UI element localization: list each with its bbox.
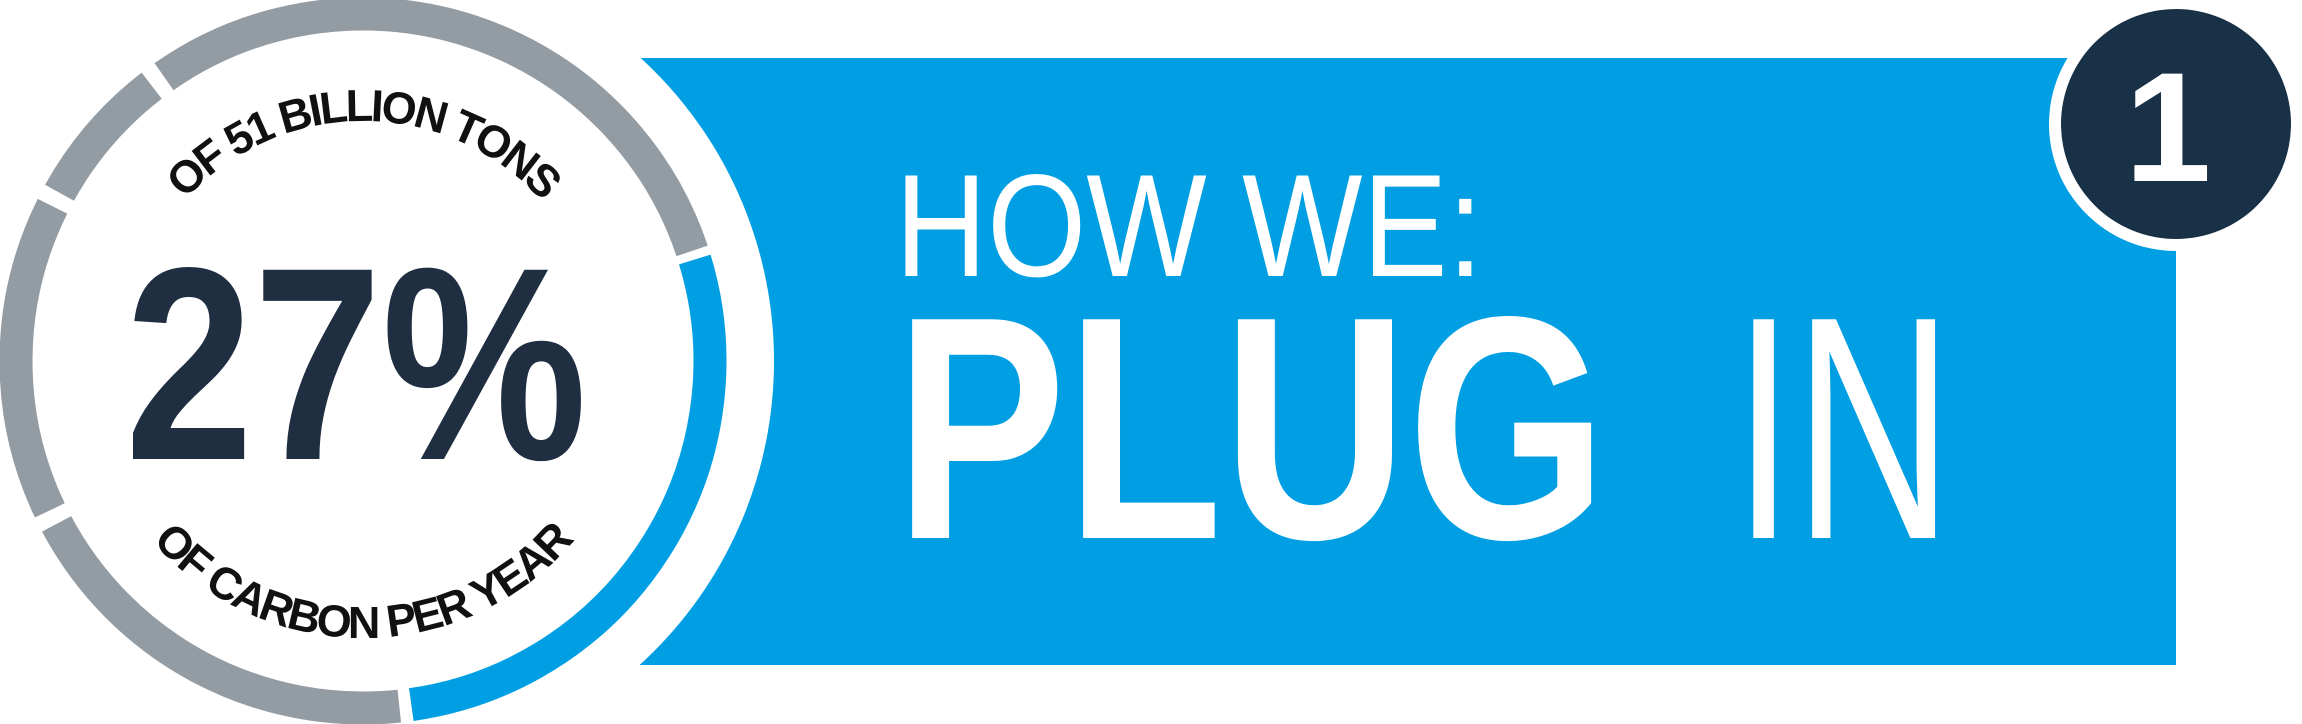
big number: 27% (125, 211, 587, 518)
badge: number 1 (2049, 0, 2302, 251)
donut ring: 27% of total (16, 14, 710, 708)
heading line 1: HOW WE: (895, 144, 1483, 307)
curved text: top: OF 51 BILLION TONS (170, 90, 560, 197)
heading line 2: PLUG (895, 251, 1607, 606)
heading line 2: IN (1733, 251, 1953, 606)
curved text: bottom: OF CARBON PER YEAR (158, 524, 575, 638)
badge: number 1: 1 (2125, 41, 2211, 215)
